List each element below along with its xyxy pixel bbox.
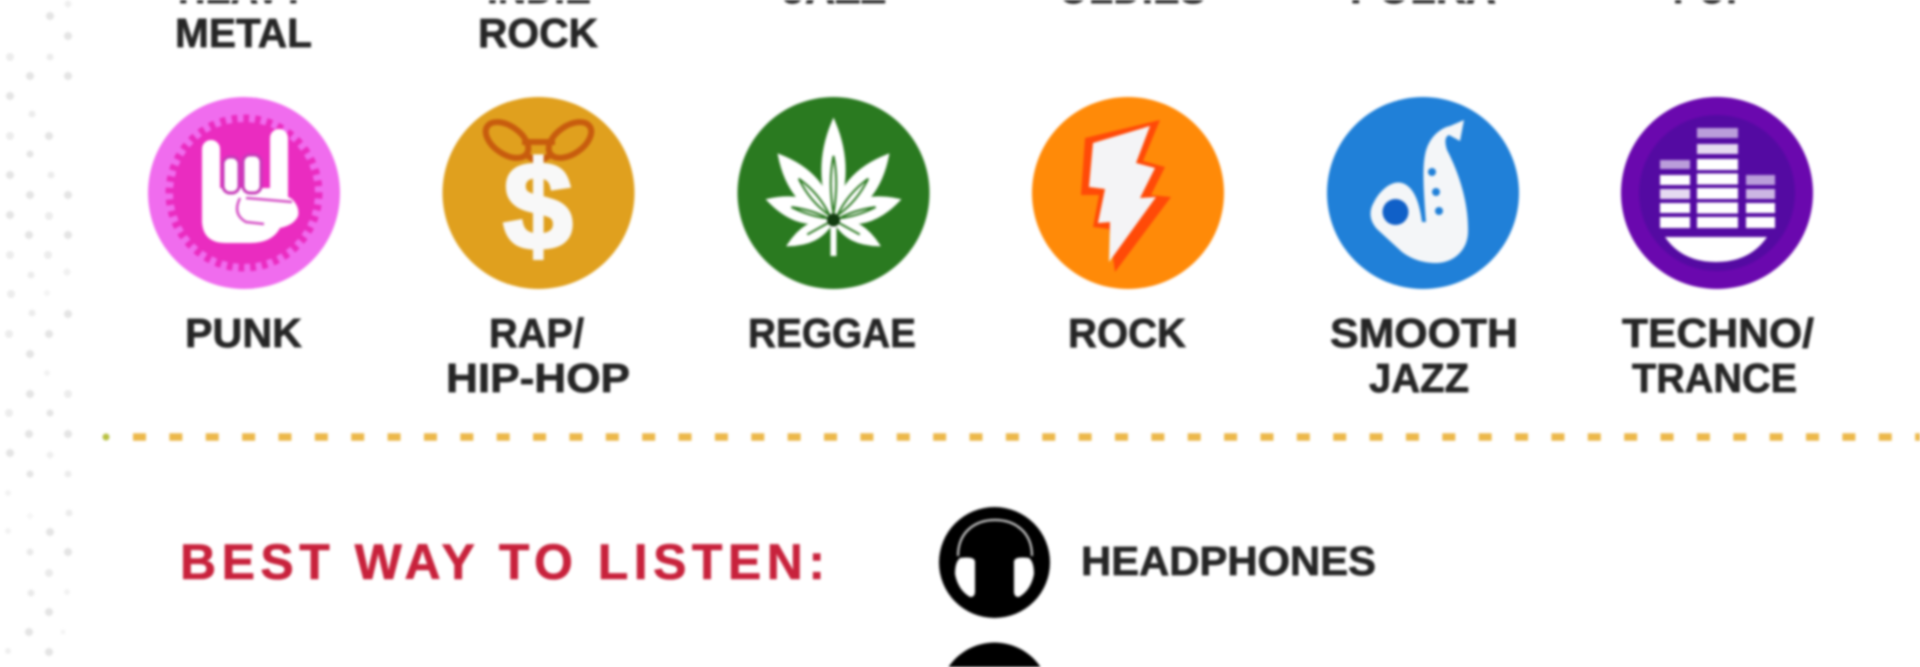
genre: rap / hip-hop (442, 97, 634, 401)
icon: dollar chain: $ (504, 138, 572, 276)
icon: punk rock hand (148, 97, 340, 289)
label: techno / trance (1622, 310, 1814, 401)
genre: techno / trance (1621, 97, 1814, 401)
icon: dollar chain (442, 97, 634, 289)
listening option: headphones (939, 507, 1376, 618)
label: rap / hip-hop: HIP-HOP (446, 355, 630, 401)
genre: rock (1032, 97, 1224, 356)
label: smooth jazz (1330, 310, 1518, 401)
label: smooth jazz: JAZZ (1369, 355, 1469, 401)
label: rap / hip-hop (446, 310, 630, 401)
icon: cannabis leaf (738, 97, 930, 289)
label: rock: ROCK (1068, 310, 1186, 356)
label: reggae: REGGAE (748, 310, 916, 356)
heading: best way to listen: BEST WAY TO LISTEN: (180, 534, 825, 590)
icon: headphones (939, 507, 1050, 618)
label: smooth jazz: SMOOTH (1330, 310, 1518, 356)
genre: reggae (738, 97, 930, 356)
label: punk: PUNK (185, 310, 302, 356)
label: techno / trance: TECHNO/ (1622, 310, 1814, 356)
top row genre labels (cropped): ROCK (478, 10, 598, 56)
icon: second listening option (cropped) (948, 643, 1040, 667)
label: rap / hip-hop: RAP/ (489, 310, 584, 356)
icon: saxophone (1327, 97, 1519, 289)
genre: punk (148, 97, 340, 356)
top row genre labels (cropped) (175, 0, 1751, 56)
genre: smooth jazz (1327, 97, 1519, 401)
top row genre labels (cropped): METAL (175, 10, 312, 56)
label: techno / trance: TRANCE (1632, 355, 1797, 401)
label: headphones: HEADPHONES (1081, 538, 1376, 584)
icon: lightning bolt (1032, 97, 1224, 289)
icon: equalizer bowl (1621, 97, 1813, 289)
